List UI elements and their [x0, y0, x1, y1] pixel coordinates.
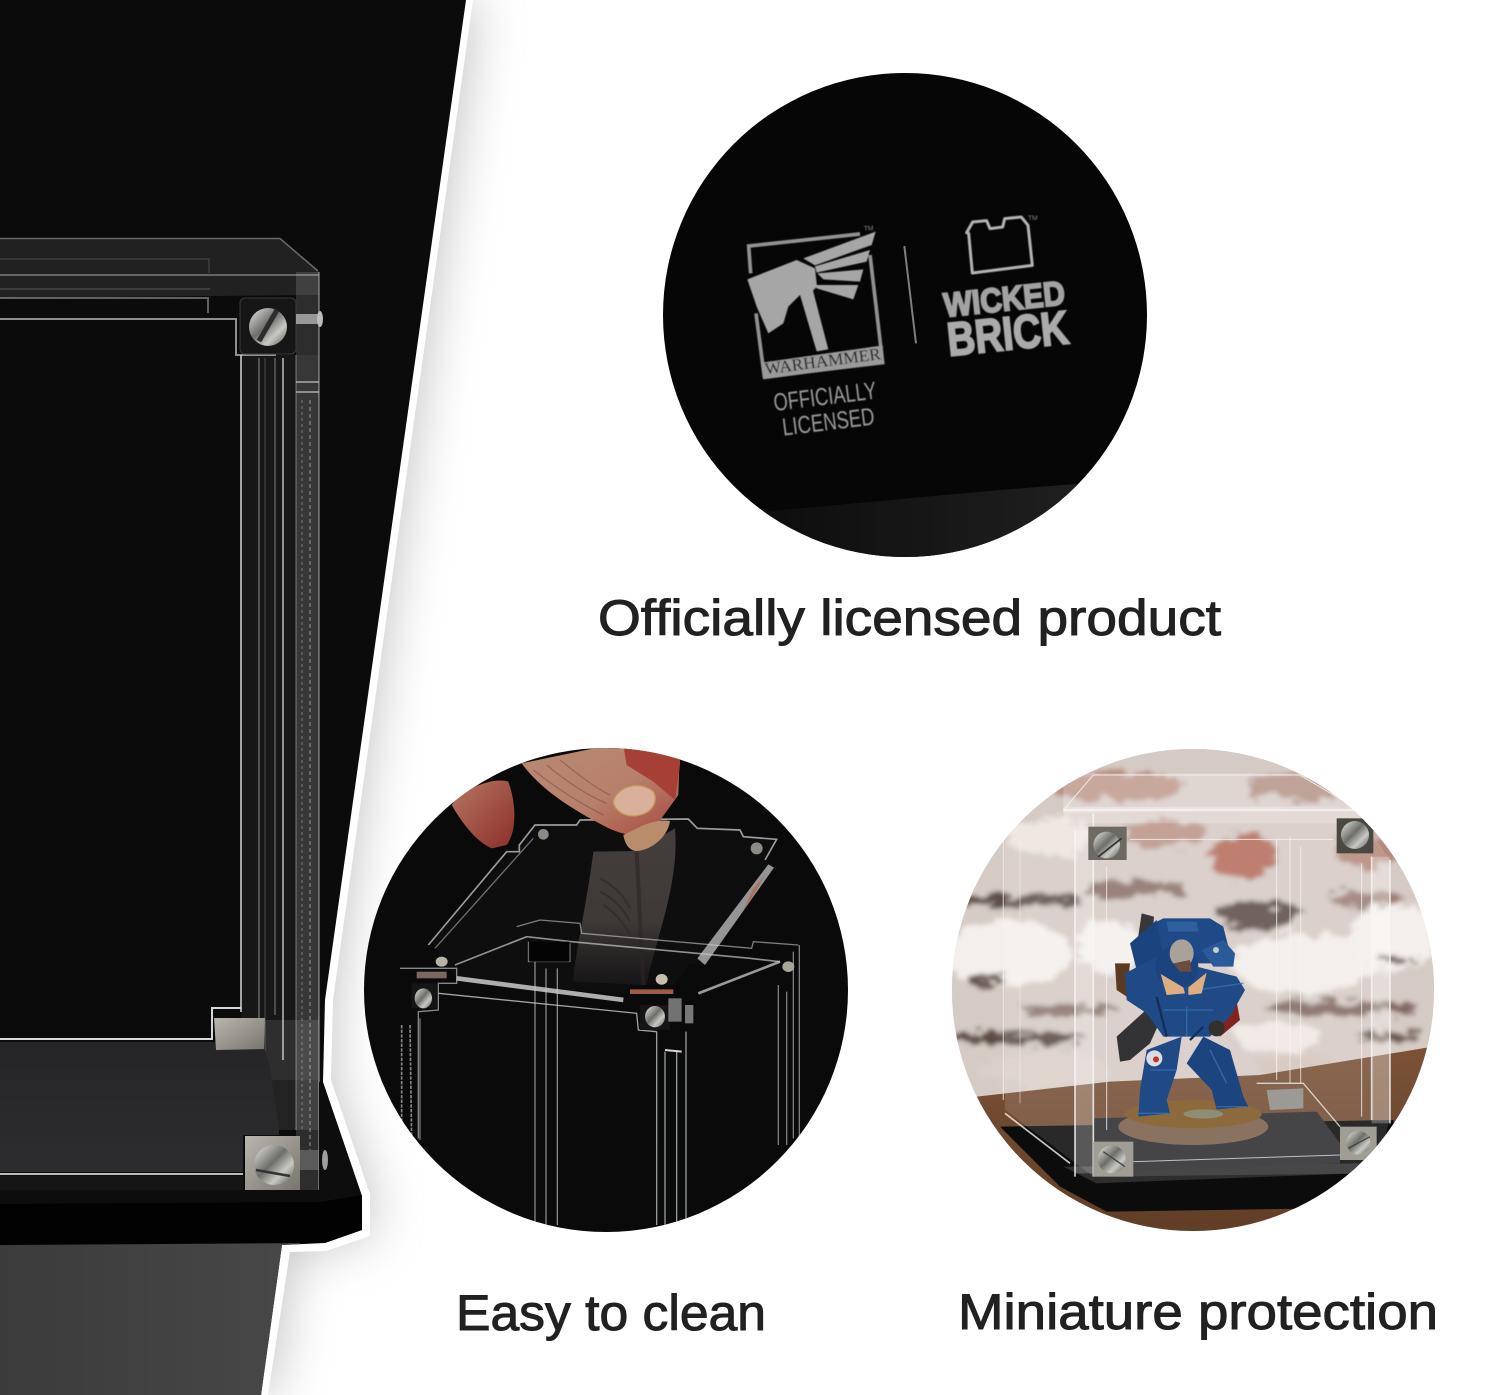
- acrylic case frame: [400, 920, 799, 1225]
- black base: [1000, 1120, 1397, 1212]
- acrylic case: [1003, 773, 1390, 1177]
- icon: front-left screw: [412, 972, 447, 1008]
- base plate: [0, 1082, 362, 1245]
- logo caption: OFFICIALLY: [772, 378, 878, 417]
- felt floor of the case: [0, 1042, 279, 1172]
- felt mat: [1093, 1112, 1340, 1172]
- icon: bottom corner screw: [245, 1136, 328, 1190]
- acrylic case top edge: [0, 238, 319, 355]
- logo: Warhammer: LICENSED: [781, 404, 876, 442]
- acrylic case right corner post: [241, 272, 319, 1190]
- icon: rear-right screw: [782, 961, 794, 972]
- rear bracket: [1267, 1088, 1303, 1110]
- photo circle: officially licensed logos: [663, 73, 1150, 560]
- photo circle: lifting the lid: [364, 745, 848, 1232]
- heading: miniature protection: Miniature protection: [958, 1284, 1438, 1340]
- panel: left case close-up photo: [0, 0, 480, 1395]
- icon: top corner screw: [240, 298, 323, 354]
- icons: case corner screws: [1088, 818, 1377, 1177]
- logo: Warhammer: [747, 225, 884, 442]
- logo: Wicked Brick: [942, 215, 1071, 367]
- hand: [452, 745, 680, 851]
- wooden table: [976, 1048, 1427, 1231]
- floor below the base: [0, 1240, 300, 1395]
- logo: Warhammer: TM: [864, 225, 874, 233]
- rear metal bracket: [214, 1018, 265, 1050]
- base plate strip: [764, 484, 1078, 557]
- heading: officially licensed product: Officially licensed product: [598, 590, 1221, 646]
- brick wall background: [952, 749, 1434, 1112]
- logo: Wicked Brick: WICKED: [942, 274, 1067, 325]
- lifted acrylic lid: [428, 819, 777, 995]
- photo circle: miniature in case: [952, 749, 1434, 1231]
- heading: easy to clean: Easy to clean: [456, 1285, 766, 1341]
- icon: front-right screw: [640, 998, 693, 1030]
- logo wordmark: WARHAMMER: [764, 344, 883, 378]
- logo: Wicked Brick: TM: [1028, 215, 1038, 222]
- miniature: space marine: [1115, 913, 1268, 1145]
- divider line: [904, 246, 916, 343]
- logo: Wicked Brick: BRICK: [945, 302, 1071, 367]
